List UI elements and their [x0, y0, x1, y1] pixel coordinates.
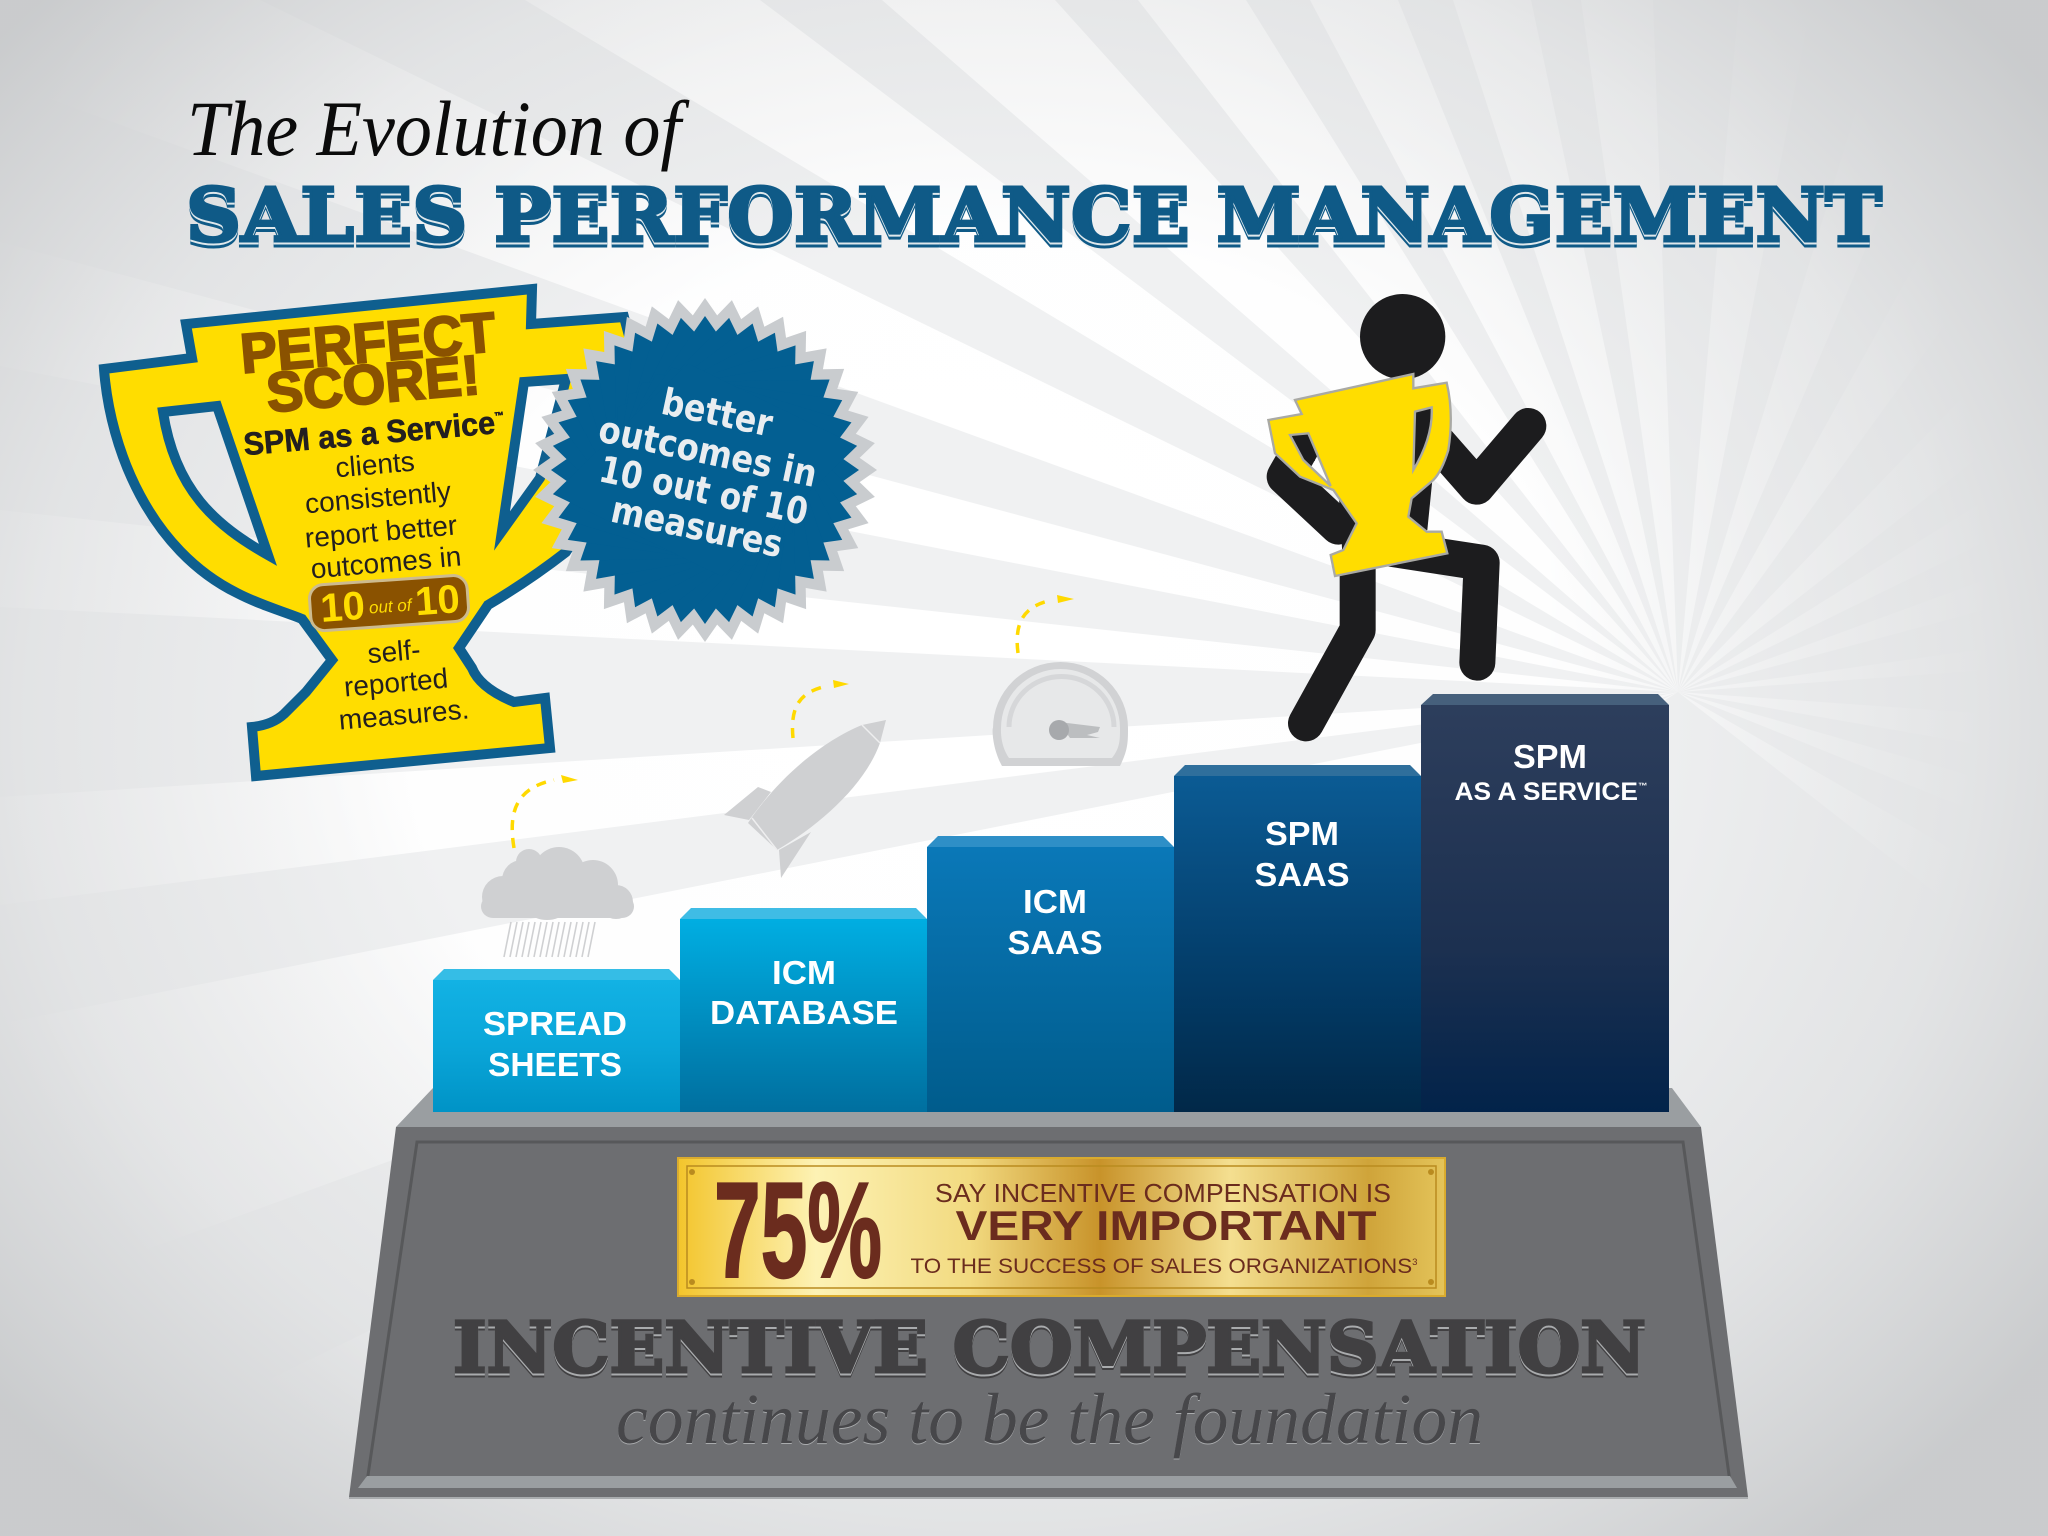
step: ICM database: ICM — [772, 954, 836, 991]
step: SPM as a service: SPM — [1513, 738, 1587, 775]
icon: storm cloud — [481, 847, 634, 957]
step: SPM as a service: AS A SERVICE — [1454, 778, 1629, 806]
trophy body text: measures. — [337, 693, 470, 736]
icon: rocket — [724, 720, 886, 878]
starburst callout — [495, 260, 915, 680]
badge: 10 out of 10 — [309, 575, 469, 632]
trophy body text: ™ — [494, 411, 504, 422]
badge: 10 out of 10: 10 — [414, 577, 461, 624]
trophy body text: reported — [343, 663, 449, 702]
plaque text: SAY INCENTIVE COMPENSATION IS — [935, 1178, 1391, 1208]
icon: speedometer — [993, 662, 1128, 766]
score headline — [238, 300, 498, 424]
badge: 10 out of 10: out of — [368, 595, 414, 617]
step: ICM database: DATABASE — [710, 994, 898, 1031]
badge: 10 out of 10: 10 — [319, 584, 366, 631]
climbing figure with trophy — [1268, 294, 1528, 723]
arrow: dashed yellow over rocket — [792, 680, 849, 738]
burst text: better — [658, 380, 777, 446]
step: ICM SaaS: ICM — [1023, 883, 1087, 920]
score headline: SCORE! — [264, 343, 482, 424]
title main line: SALES PERFORMANCE MANAGEMENT — [186, 173, 1882, 259]
trophy body text — [242, 404, 506, 736]
step: SPM as a service: ™ — [1638, 781, 1648, 791]
score headline: PERFECT — [238, 300, 498, 385]
foundation heading: INCENTIVE COMPENSATION — [453, 1306, 1646, 1389]
trophy body text: self- — [366, 634, 422, 669]
pedestal — [349, 1088, 1748, 1499]
step: SPM as a service — [1421, 694, 1669, 1112]
step: spreadsheets — [433, 969, 681, 1112]
trophy with perfect score — [104, 289, 640, 776]
figure: body and limbs — [1285, 403, 1528, 723]
title script line: The Evolution of — [187, 85, 690, 172]
trophy body text: clients — [334, 446, 416, 483]
burst: grey ring — [495, 260, 915, 680]
arrow: dashed yellow over speedometer — [1017, 595, 1074, 653]
arrow: dashed yellow over cloud — [512, 775, 578, 848]
burst: blue fill — [517, 282, 893, 658]
burst text — [579, 368, 829, 570]
step: spreadsheets: SHEETS — [488, 1046, 622, 1083]
trophy body text: consistently — [304, 476, 452, 519]
step: SPM SaaS: SAAS — [1254, 856, 1350, 893]
burst text: measures — [607, 488, 787, 566]
step: SPM SaaS — [1174, 765, 1422, 1112]
burst text: 10 out of 10 — [596, 448, 812, 534]
burst text: outcomes in — [595, 408, 821, 496]
step: ICM SaaS — [927, 836, 1175, 1112]
trophy shape — [104, 289, 640, 776]
plaque text: 3 — [1412, 1257, 1418, 1267]
step: ICM database — [680, 908, 928, 1112]
plaque text — [910, 1178, 1418, 1278]
trophy body text: report better — [304, 509, 458, 554]
plaque text: VERY IMPORTANT — [956, 1202, 1377, 1249]
trophy body text: outcomes in — [309, 540, 463, 585]
step: SPM SaaS: SPM — [1265, 815, 1339, 852]
plaque statistic: 75% — [714, 1154, 882, 1306]
small trophy — [1268, 374, 1451, 576]
gold plaque — [678, 1154, 1445, 1306]
figure: head — [1360, 294, 1445, 379]
trophy body text: SPM as a Service — [242, 403, 507, 462]
step: ICM SaaS: SAAS — [1008, 924, 1102, 961]
foundation subheading: continues to be the foundation — [616, 1379, 1483, 1459]
plaque text: TO THE SUCCESS OF SALES ORGANIZATIONS — [910, 1255, 1381, 1278]
step: spreadsheets: SPREAD — [483, 1005, 627, 1042]
